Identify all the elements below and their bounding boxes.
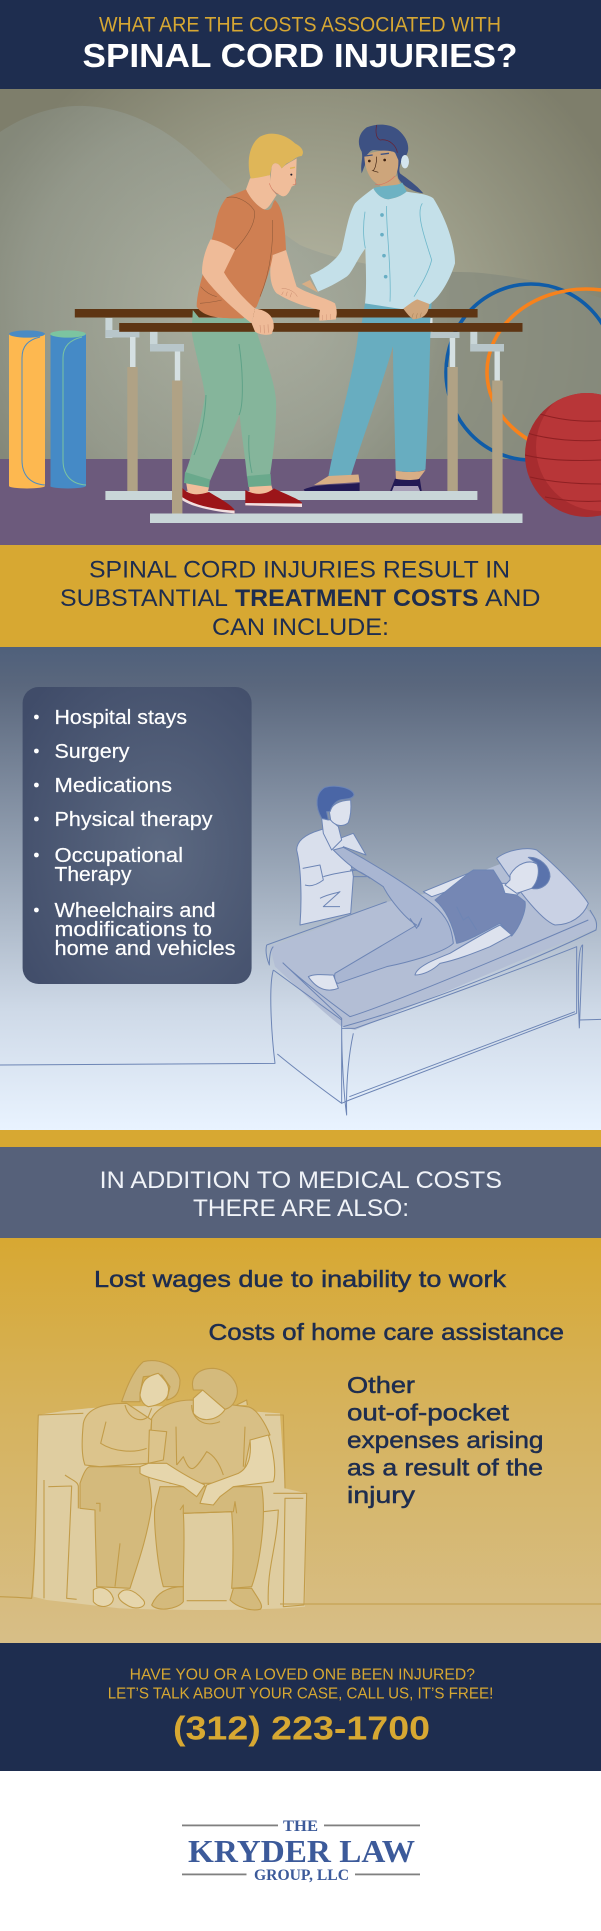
card: treatment list: Hospital stays — [54, 707, 187, 729]
text: lost wages: Lost wages due to inability to work — [94, 1266, 506, 1292]
panel: therapy room illustration — [0, 89, 601, 545]
section heading: treatment costs: TREATMENT COSTS — [235, 585, 478, 612]
head, torso, far arm — [197, 134, 337, 323]
icon: rolled exercise mats — [9, 330, 86, 488]
equipment: hoops and exercise ball — [446, 284, 601, 520]
card: treatment list: Occupational — [54, 845, 183, 867]
call to action footer — [0, 1643, 601, 1771]
card: treatment list: Medications — [54, 775, 172, 797]
section heading: additional costs: THERE ARE ALSO: — [193, 1195, 409, 1222]
yellow mat — [9, 334, 45, 486]
section heading: additional costs — [0, 1147, 601, 1238]
woman — [80, 1361, 180, 1608]
card: treatment list — [23, 687, 252, 984]
therapist figure — [302, 125, 455, 491]
panel: non-medical costs — [0, 1238, 601, 1643]
therapist hand on rail — [403, 299, 429, 319]
illustration: therapist stretching patient on treatment table — [0, 786, 601, 1115]
trousers — [328, 323, 432, 478]
text: other expenses: expenses arising — [347, 1427, 544, 1453]
wall shape — [0, 106, 601, 459]
card: treatment list: Therapy — [54, 864, 132, 886]
gold divider — [0, 1130, 601, 1147]
title: SPINAL CORD INJURIES? — [82, 37, 518, 74]
rear handrail — [75, 309, 478, 318]
logo: The Kryder Law Group, LLC: GROUP, LLC — [254, 1867, 349, 1884]
blue mat — [50, 334, 86, 486]
text: other expenses: out-of-pocket — [347, 1400, 510, 1426]
text: other expenses: as a result of the — [347, 1454, 543, 1480]
cuffs — [184, 472, 210, 488]
treatment table — [0, 850, 601, 1115]
call to action footer: LET’S TALK ABOUT YOUR CASE, CALL US, IT’S FREE! — [108, 1686, 493, 1702]
text: other expenses: injury — [347, 1482, 415, 1508]
sofa — [0, 1406, 601, 1610]
illustration: couple on sofa — [0, 1361, 601, 1610]
man — [140, 1368, 275, 1610]
phone number: (312) 223-1700 — [173, 1710, 430, 1746]
ankles — [186, 482, 274, 496]
floor — [0, 459, 601, 545]
front handrail — [119, 323, 522, 332]
patient on table — [308, 847, 588, 990]
card: treatment list: Surgery — [54, 741, 130, 763]
section heading: treatment costs: AND — [485, 585, 540, 612]
section heading: treatment costs: CAN INCLUDE: — [212, 614, 389, 641]
header banner — [0, 0, 601, 89]
text: other expenses — [347, 1372, 544, 1508]
section heading: additional costs: IN ADDITION TO MEDICAL COSTS — [100, 1167, 502, 1194]
header kicker: WHAT ARE THE COSTS ASSOCIATED WITH — [99, 14, 501, 36]
card: treatment list: Wheelchairs and — [54, 900, 216, 922]
section heading: treatment costs — [0, 545, 601, 647]
logo: The Kryder Law Group, LLC: KRYDER LAW — [188, 1833, 415, 1869]
red shoes — [182, 488, 235, 513]
text: home care: Costs of home care assistance — [208, 1319, 564, 1345]
shoes and feet — [314, 474, 360, 485]
icon: orange hoop — [487, 289, 601, 455]
text: other expenses: Other — [347, 1372, 415, 1398]
call to action footer: HAVE YOU OR A LOVED ONE BEEN INJURED? — [130, 1666, 475, 1684]
logo: The Kryder Law Group, LLC: THE — [283, 1818, 318, 1835]
parallel bars: rear supports — [105, 318, 477, 500]
card: treatment list: home and vehicles — [54, 938, 235, 960]
trousers — [185, 310, 276, 481]
parallel bars: front supports — [150, 332, 522, 523]
therapist — [297, 786, 366, 925]
card: treatment list: modifications to — [54, 919, 212, 941]
icon: red exercise ball — [525, 393, 601, 517]
logo: The Kryder Law Group, LLC — [182, 1818, 420, 1884]
section heading: treatment costs: SPINAL CORD INJURIES RESULT IN — [89, 556, 510, 584]
card: treatment list: Physical therapy — [54, 809, 212, 831]
patient hand on front rail — [252, 308, 336, 335]
patient figure — [182, 134, 337, 513]
panel: treatment costs — [0, 647, 601, 1130]
section heading: treatment costs: SUBSTANTIAL — [60, 585, 228, 612]
icon: blue hoop — [446, 284, 601, 460]
upper body — [302, 125, 455, 323]
